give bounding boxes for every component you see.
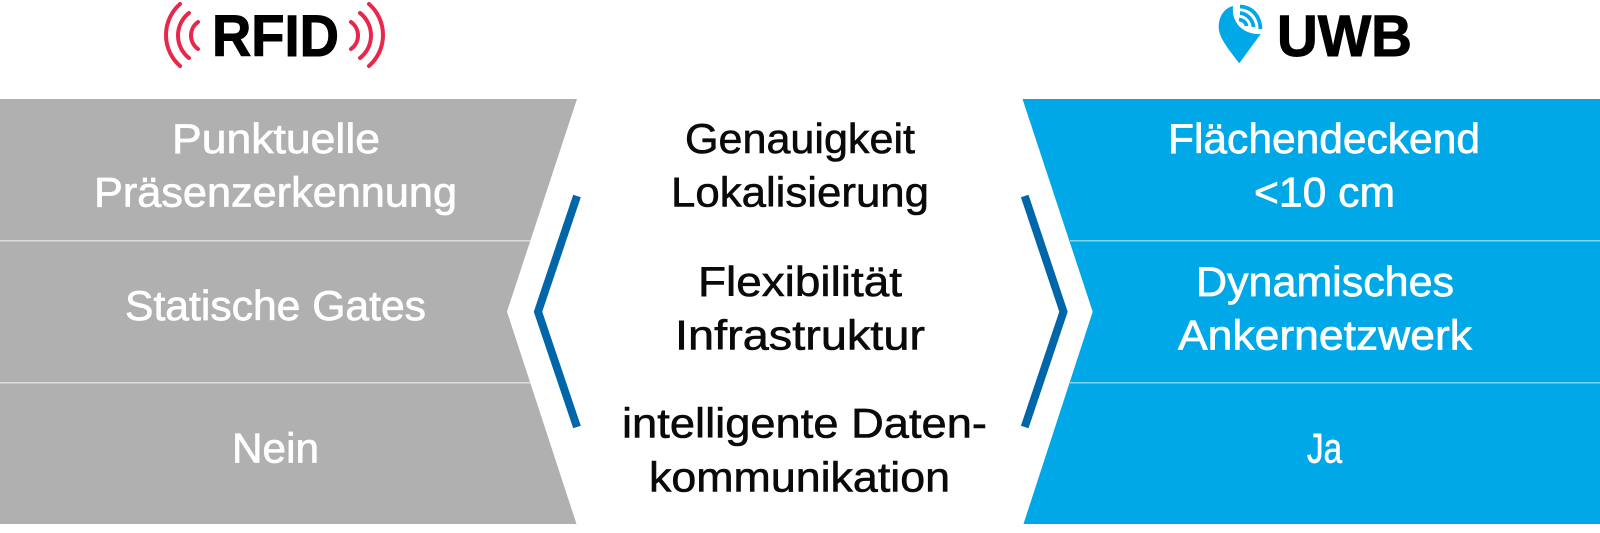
arrow: left chevron	[538, 196, 577, 427]
arrow: right chevron	[1025, 196, 1064, 427]
icon: UWB location pin	[1219, 6, 1261, 63]
panel: UWB column	[1022, 99, 1600, 524]
text: Genauigkeit Lokalisierung	[671, 115, 929, 216]
icon: right radio waves	[351, 4, 383, 66]
heading: RFID: RFID	[212, 4, 339, 69]
text: Dynamisches Ankernetzwerk	[1178, 258, 1473, 358]
text: Dynamisches Ankernetzwerk: Ankernetzwerk	[1178, 311, 1473, 358]
text: intelligente Datenkommunikation: intelligente Daten-	[622, 400, 987, 447]
text: Nein: Nein	[232, 424, 319, 471]
text: intelligente Datenkommunikation: kommunikation	[649, 454, 950, 501]
text: Punktuelle Präsenzerkennung: Präsenzerkennung	[94, 169, 457, 216]
text: Flächendeckend <10 cm	[1168, 115, 1480, 216]
heading: UWB: UWB	[1277, 4, 1412, 69]
text: Ja: Ja	[1307, 424, 1343, 471]
text: Flexibilität Infrastruktur	[675, 258, 925, 358]
panel: RFID column	[0, 99, 577, 524]
text: Genauigkeit Lokalisierung: Genauigkeit	[685, 115, 915, 162]
icon: left radio waves	[166, 4, 198, 66]
text: Flexibilität Infrastruktur: Infrastruktur	[675, 311, 925, 358]
text: intelligente Datenkommunikation	[622, 400, 987, 501]
text: Flexibilität Infrastruktur: Flexibilität	[698, 258, 902, 305]
icon: RFID logo with radio waves	[166, 4, 383, 69]
text: Genauigkeit Lokalisierung: Lokalisierung	[671, 169, 929, 216]
text: Statische Gates: Statische Gates	[125, 282, 426, 329]
text: Flächendeckend <10 cm: <10 cm	[1254, 169, 1395, 216]
text: Punktuelle Präsenzerkennung	[94, 115, 457, 216]
text: Punktuelle Präsenzerkennung: Punktuelle	[172, 115, 380, 162]
text: Flächendeckend <10 cm: Flächendeckend	[1168, 115, 1480, 162]
text: Dynamisches Ankernetzwerk: Dynamisches	[1196, 258, 1454, 305]
